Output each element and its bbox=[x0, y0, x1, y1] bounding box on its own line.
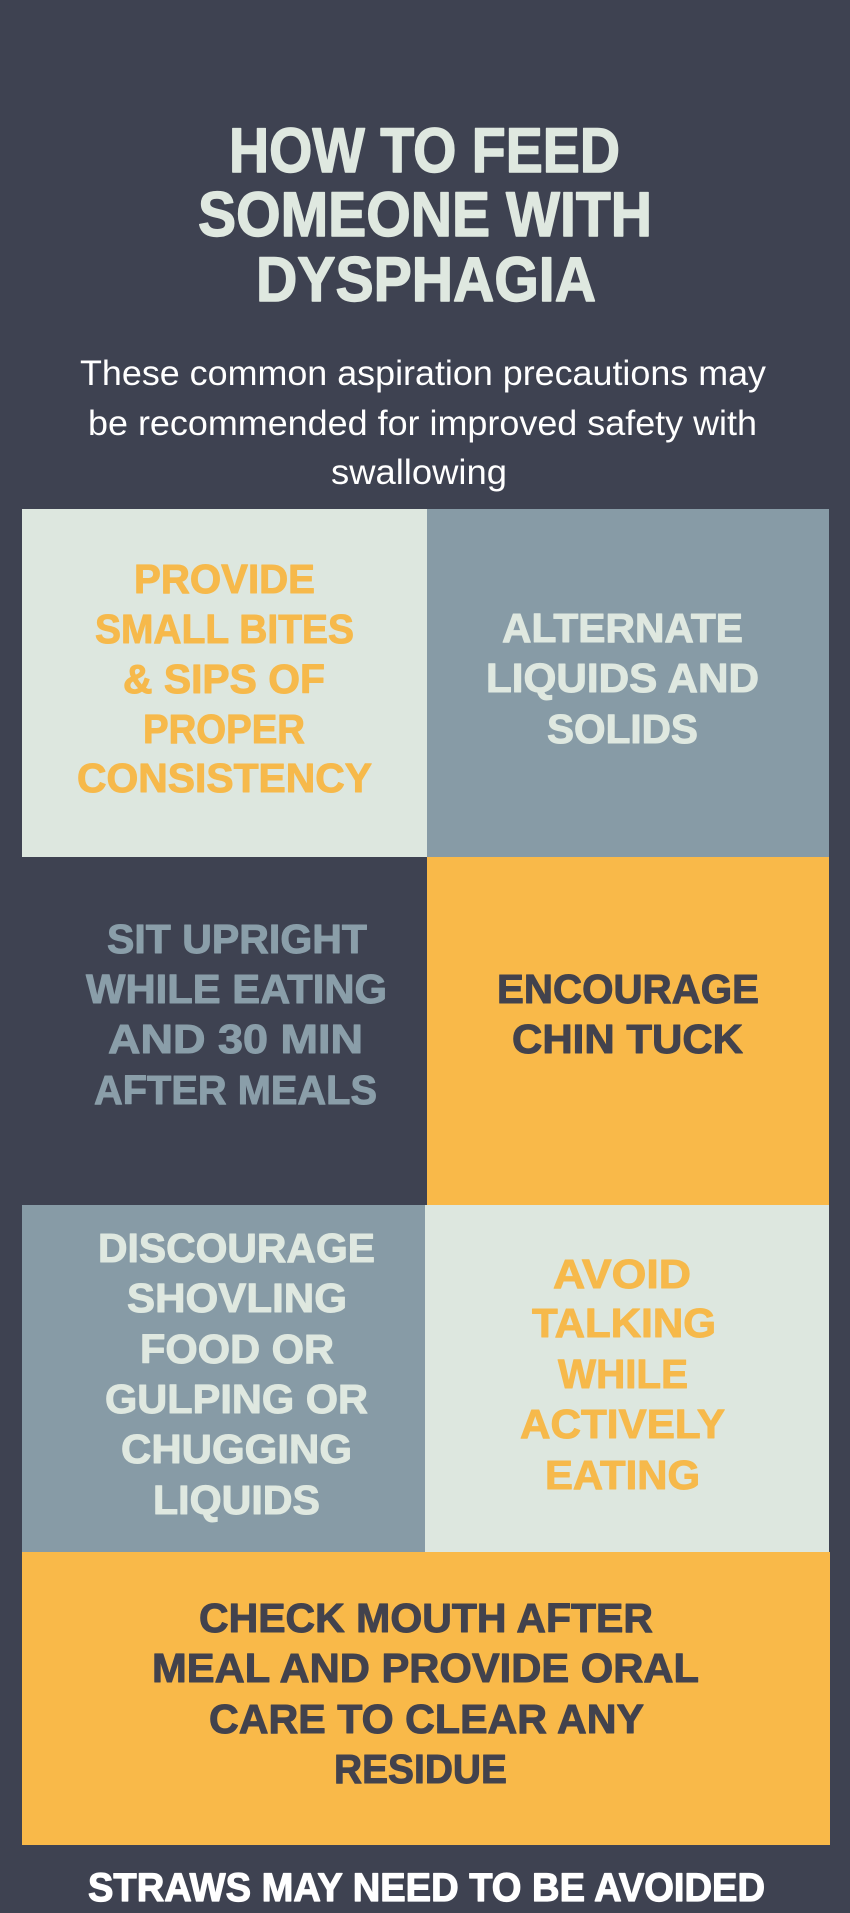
panel: discourage shovling food: FOOD OR bbox=[140, 1326, 334, 1372]
panel: check mouth after meal: CARE TO CLEAR ANY bbox=[209, 1696, 644, 1742]
panel: sit upright: WHILE EATING bbox=[86, 966, 387, 1012]
panel: alternate liquids and solids: LIQUIDS AND bbox=[486, 655, 759, 701]
panel: sit upright bbox=[22, 857, 427, 1205]
panel: small bites and sips: SMALL BITES bbox=[95, 606, 354, 652]
panel: sit upright: AFTER MEALS bbox=[94, 1067, 377, 1113]
intro text: swallowing bbox=[331, 453, 507, 492]
panel: small bites and sips: CONSISTENCY bbox=[77, 755, 372, 801]
panel: discourage shovling food: GULPING OR bbox=[105, 1376, 368, 1422]
panel: avoid talking: AVOID bbox=[553, 1251, 691, 1297]
panel: alternate liquids and solids: SOLIDS bbox=[547, 706, 698, 752]
panel: discourage shovling food: DISCOURAGE bbox=[98, 1225, 375, 1271]
panel: small bites and sips bbox=[22, 509, 427, 857]
panel: avoid talking: WHILE bbox=[558, 1351, 688, 1397]
title bbox=[198, 116, 652, 315]
panel: avoid talking: ACTIVELY bbox=[520, 1401, 725, 1447]
panel: check mouth after meal: RESIDUE bbox=[334, 1746, 507, 1792]
panel: encourage chin tuck: CHIN TUCK bbox=[512, 1016, 743, 1062]
title: DYSPHAGIA bbox=[256, 245, 596, 315]
panel: sit upright: SIT UPRIGHT bbox=[107, 916, 367, 962]
panel: sit upright: AND 30 MIN bbox=[108, 1016, 363, 1062]
panel: alternate liquids and solids bbox=[427, 509, 829, 857]
panel: discourage shovling food: SHOVLING bbox=[127, 1275, 347, 1321]
intro text bbox=[80, 354, 766, 492]
intro text: These common aspiration precautions may bbox=[80, 354, 766, 393]
panel: small bites and sips: & SIPS OF bbox=[123, 656, 325, 702]
title: SOMEONE WITH bbox=[198, 180, 652, 250]
title: HOW TO FEED bbox=[229, 116, 620, 186]
intro text: be recommended for improved safety with bbox=[88, 404, 757, 443]
panel: avoid talking: TALKING bbox=[532, 1300, 716, 1346]
panel: small bites and sips: PROVIDE bbox=[134, 556, 315, 602]
panel: small bites and sips: PROPER bbox=[143, 706, 305, 752]
panel: check mouth after meal: MEAL AND PROVIDE ORAL bbox=[152, 1645, 699, 1691]
panel: check mouth after meal: CHECK MOUTH AFTER bbox=[199, 1595, 653, 1641]
panel: discourage shovling food: CHUGGING bbox=[121, 1426, 352, 1472]
panel: discourage shovling food: LIQUIDS bbox=[153, 1477, 320, 1523]
panel: avoid talking: EATING bbox=[545, 1452, 700, 1498]
panel: check mouth after meal bbox=[22, 1552, 830, 1845]
panel: encourage chin tuck: ENCOURAGE bbox=[497, 966, 759, 1012]
footer note: STRAWS MAY NEED TO BE AVOIDED bbox=[88, 1866, 765, 1910]
panel: encourage chin tuck bbox=[427, 857, 829, 1205]
panel: avoid talking bbox=[425, 1205, 829, 1552]
panel: discourage shovling food bbox=[22, 1205, 425, 1552]
panel: alternate liquids and solids: ALTERNATE bbox=[502, 605, 743, 651]
